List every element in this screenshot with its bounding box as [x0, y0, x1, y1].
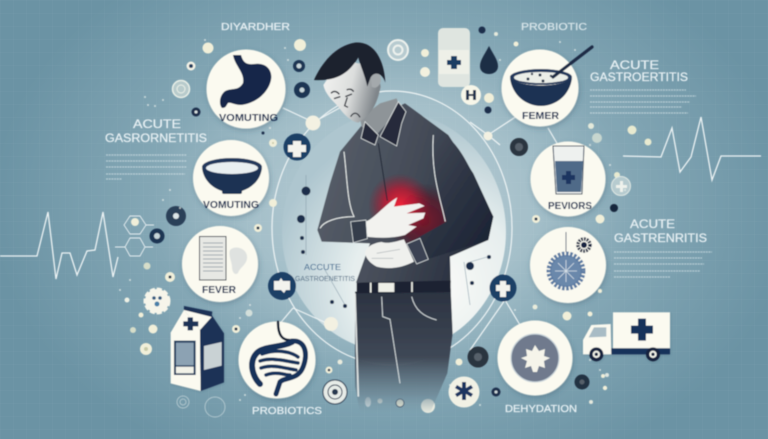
- heading: probiotic: PROBIOTIC: [521, 21, 587, 33]
- central rings and connectors: [262, 91, 558, 365]
- facial features: [331, 89, 360, 117]
- label: probiotics: PROBIOTICS: [252, 405, 322, 417]
- text block: left: [105, 117, 207, 179]
- center label: GASTROENETITIS: [295, 274, 355, 283]
- shirt placket: [378, 143, 387, 201]
- label: vomuting: VOMUTING: [203, 199, 259, 211]
- panel: soup bowl: [502, 47, 592, 126]
- icon: drop: [480, 46, 498, 74]
- icon: milk carton: [171, 306, 224, 391]
- torso: [317, 103, 493, 283]
- icon: document: [200, 236, 247, 280]
- molecule hexagons: [115, 216, 154, 256]
- center timeline dots: [297, 175, 491, 308]
- text block: upper right: [590, 58, 696, 113]
- right sleeve: [407, 132, 493, 262]
- text block: lower right: [614, 217, 712, 277]
- panel: glass: [530, 142, 606, 216]
- collar: [361, 102, 406, 146]
- text block: left: ACUTE: [133, 117, 181, 131]
- text block: upper right: GASTROERTITIS: [590, 72, 688, 84]
- icon: stomach: [220, 55, 271, 108]
- panel: intestines: [238, 322, 316, 398]
- panel: bowl: [193, 140, 269, 216]
- icon: bowl: [202, 158, 262, 194]
- text block: upper right: ACUTE: [610, 58, 659, 72]
- hair: [314, 43, 385, 87]
- ECG line right: [623, 117, 761, 180]
- panel: virus flower: [530, 227, 606, 303]
- cuffs: [407, 238, 428, 264]
- ear: [371, 72, 381, 88]
- left arm line: [320, 152, 354, 228]
- label: dehydration: DEHYDATION: [505, 403, 577, 415]
- lower hand: [365, 239, 414, 268]
- icon: flower: [145, 289, 169, 313]
- neck: [360, 98, 400, 137]
- ring nodes: [268, 116, 516, 331]
- label: peviors: PEVIORS: [548, 200, 592, 212]
- belt: [357, 281, 451, 293]
- center label: ACCUTE: [304, 263, 341, 272]
- icon: virus: [549, 232, 590, 288]
- panel: fever: [182, 226, 258, 302]
- panel: stomach: [206, 50, 286, 128]
- icon: medicine jar: [438, 28, 470, 87]
- text block: left: GASRORNETITIS: [105, 133, 207, 145]
- panel: dehydration: [498, 320, 572, 396]
- icon: soup bowl: [510, 47, 592, 106]
- decorative dots and target icons: [119, 26, 652, 417]
- icon: intestines: [252, 322, 305, 394]
- center label: [295, 263, 355, 283]
- icon: virus disc: [511, 334, 559, 382]
- text block: lower right: GASTRENRITIS: [614, 233, 707, 245]
- pants: [355, 288, 453, 413]
- icon: ambulance: [583, 312, 670, 361]
- upper hand: [365, 197, 425, 238]
- heading: diyarrhea: DIYARDHER: [221, 21, 290, 33]
- label: vomuting: VOMUTING: [219, 112, 278, 124]
- central figure: man holding stomach: [314, 43, 493, 413]
- abdominal red glow: [370, 176, 446, 243]
- face: [323, 60, 381, 123]
- label: femer: FEMER: [522, 110, 559, 122]
- icon: glass: [553, 146, 584, 194]
- label: fever: FEVER: [202, 284, 236, 296]
- ECG line left: [0, 212, 118, 279]
- text block: lower right: ACUTE: [630, 217, 675, 231]
